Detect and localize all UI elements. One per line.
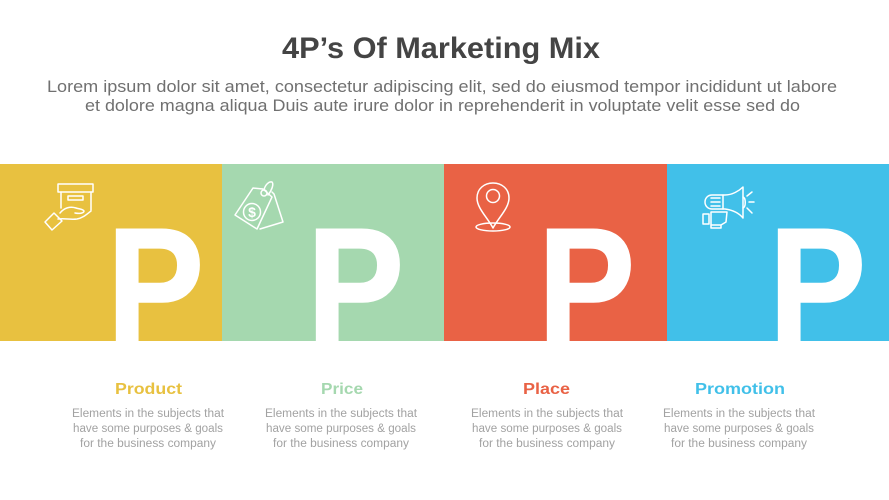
column: product — [72, 381, 225, 450]
description: price — [265, 408, 418, 450]
column: price — [265, 381, 418, 450]
description: place: have some purposes & goals — [472, 423, 622, 435]
description: price: for the business company — [273, 438, 409, 450]
description: place: Elements in the subjects that — [471, 408, 624, 420]
icon: hand holding box — [45, 184, 93, 230]
description: product: Elements in the subjects that — [72, 408, 225, 420]
letter P: price: P — [307, 195, 404, 376]
description: price: have some purposes & goals — [266, 423, 416, 435]
panel: product — [0, 164, 222, 376]
icon: price tags: $ — [248, 204, 256, 220]
description: promotion — [663, 408, 816, 450]
heading: promotion: Promotion — [695, 381, 785, 398]
intro text: Lorem ipsum dolor sit amet, consectetur adipiscing elit, sed do eiusmod tempor incididunt ut labore — [47, 77, 837, 96]
title: 4P’s Of Marketing Mix — [282, 32, 600, 65]
icon: location pin — [476, 183, 510, 231]
intro text: et dolore magna aliqua Duis aute irure dolor in reprehenderit in voluptate velit esse sed do — [85, 96, 800, 115]
letter P: place: P — [538, 195, 635, 376]
description: place — [471, 408, 624, 450]
heading: price: Price — [321, 381, 363, 398]
icon: price tags — [235, 182, 283, 229]
column: promotion — [663, 381, 816, 450]
panel: promotion — [667, 164, 889, 376]
description: product — [72, 408, 225, 450]
description: price: Elements in the subjects that — [265, 408, 418, 420]
description: promotion: have some purposes & goals — [664, 423, 814, 435]
description: product: have some purposes & goals — [73, 423, 223, 435]
heading: place: Place — [523, 381, 570, 398]
heading: product: Product — [115, 381, 183, 398]
intro text — [47, 77, 837, 115]
panel: price — [222, 164, 444, 376]
letter P: promotion: P — [769, 195, 866, 376]
icon: megaphone — [703, 187, 754, 228]
description: product: for the business company — [80, 438, 216, 450]
description: promotion: Elements in the subjects that — [663, 408, 816, 420]
description: promotion: for the business company — [671, 438, 807, 450]
column: place — [471, 381, 624, 450]
panel: place — [444, 164, 667, 376]
description: place: for the business company — [479, 438, 615, 450]
letter P: product: P — [107, 195, 204, 376]
